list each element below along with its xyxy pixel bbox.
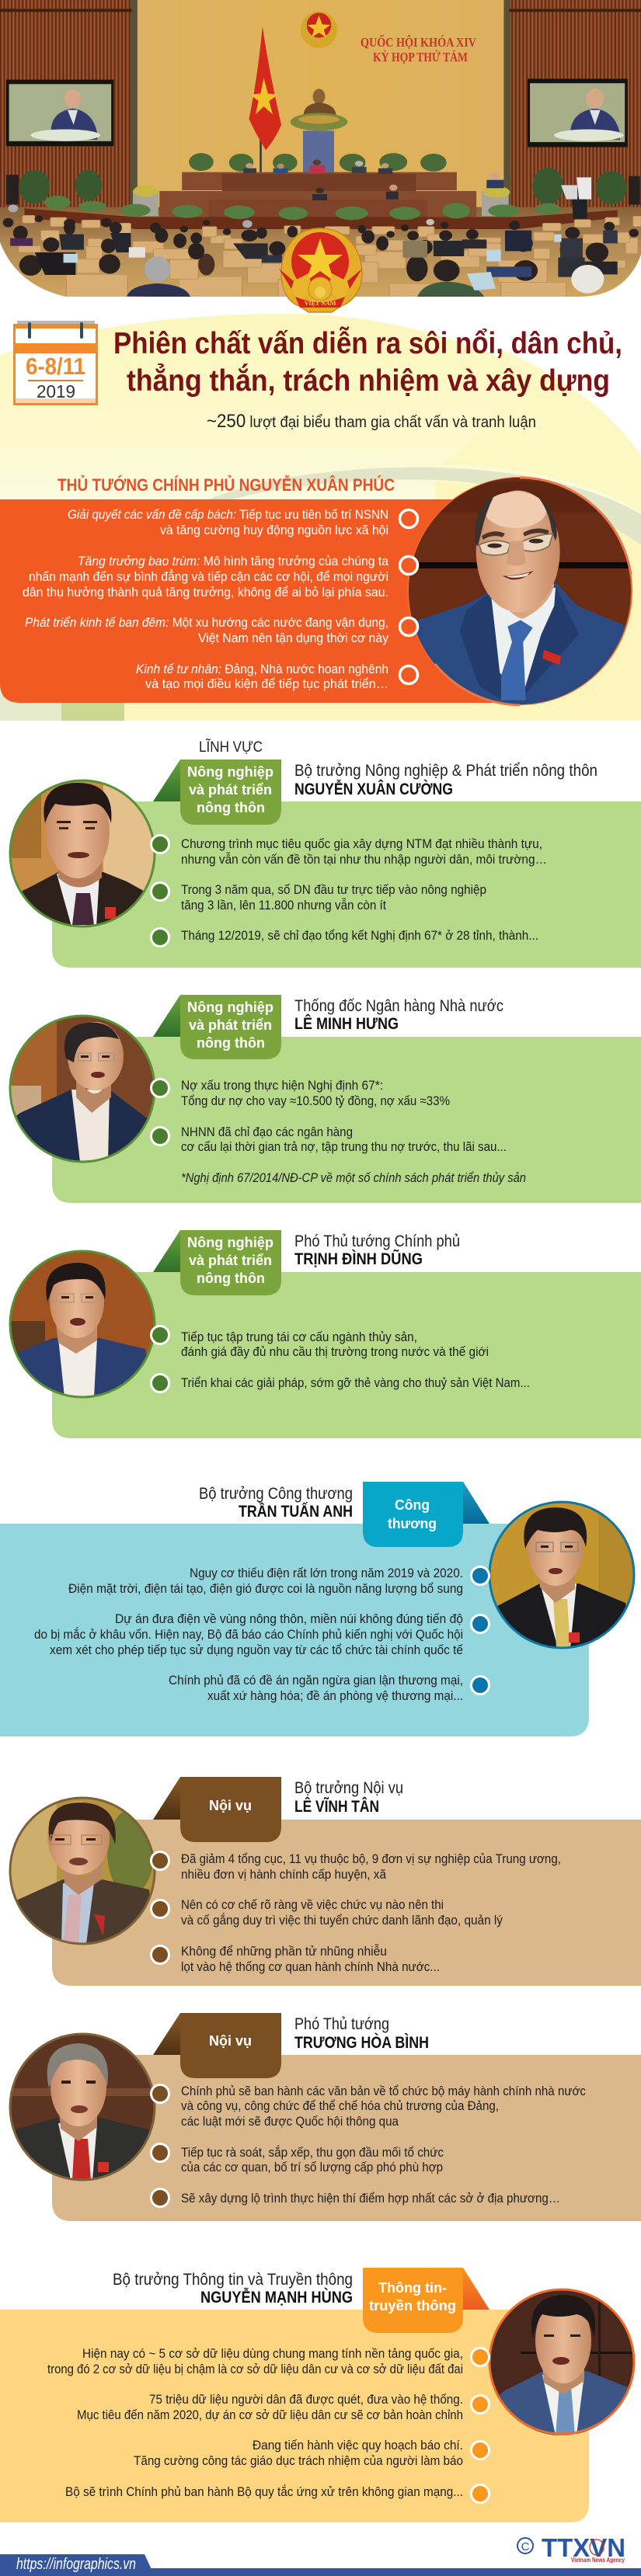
panel: Lê Vĩnh Tân (10, 1777, 641, 1986)
text: Trong 3 năm qua, số DN đầu tư trực tiếp vào nông nghiệp (181, 882, 486, 897)
lower hall: stage and audience (0, 160, 641, 301)
side plants (19, 168, 627, 204)
small emblem on the wall (301, 12, 337, 48)
text: và công vụ, công chức để thể chế hóa chủ trương của Đảng, (181, 2098, 499, 2113)
speakers (6, 175, 640, 204)
hall title text: QUỐC HỘI KHÓA XIV (361, 34, 477, 50)
text: policy points (23, 507, 388, 691)
text: nhiều đơn vị hành chính cấp huyện, xã (181, 1867, 386, 1882)
portrait (10, 1798, 155, 1944)
text: các luật mới sẽ được Quốc hội thông qua (181, 2114, 399, 2129)
portrait (489, 2289, 634, 2435)
tab: home affairs: Nội vụ (209, 1798, 252, 1813)
text: Chính phủ đã có đề án ngăn ngừa gian lận thương mại, (169, 1673, 463, 1688)
text: Đang tiến hành việc quy hoạch báo chí. (253, 2438, 463, 2453)
text: Sẽ xây dựng lộ trình thực hiện thí điểm hợp nhất các sở ở địa phương… (181, 2191, 560, 2206)
text: Không để những phần tử nhũng nhiễu (181, 1944, 387, 1959)
tab: industry and trade: Công (395, 1497, 430, 1513)
text: Dự án đưa điện về vùng nông thôn, miền núi không đúng tiến độ (115, 1611, 463, 1626)
tab: information and communications: Thông tin- (378, 2280, 447, 2296)
text: *Nghị định 67/2014/NĐ-CP về một số chính sách phát triển thủy sản (181, 1170, 526, 1185)
tab: information and communications: truyền thông (369, 2298, 456, 2314)
text: lọt vào hệ thống cơ quan hành chính Nhà nước... (181, 1959, 440, 1974)
role and name (294, 1779, 403, 1816)
tab: home affairs: Nội vụ (209, 2033, 252, 2049)
role and name: LÊ VĨNH TÂN (294, 1797, 379, 1816)
text: policy points: Việt Nam nên tận dụng thời cơ này (198, 631, 388, 645)
text (181, 1078, 526, 1185)
right screen (528, 78, 628, 147)
text: đánh giá đầy đủ nhu cầu thị trường trong nước và thế giới (181, 1344, 489, 1359)
text: Chương trình mục tiêu quốc gia xây dựng NTM đạt nhiều thành tựu, (181, 836, 542, 851)
portrait (489, 1502, 634, 1648)
role and name: Phó Thủ tướng Chính phủ (294, 1232, 460, 1250)
tab: home affairs (153, 2013, 281, 2078)
role and name: Bộ trưởng Nông nghiệp & Phát triển nông thôn (294, 762, 597, 780)
text: policy points: nhấn mạnh đến sự bình đẳng và tiếp cận các cơ hội, để mọi người (29, 569, 388, 584)
logo: TTXVN: C (521, 2540, 530, 2553)
footer bar with URL (0, 2554, 641, 2576)
role and name (294, 997, 503, 1033)
tab: agriculture: Nông nghiệp (187, 1235, 273, 1250)
podiums (133, 186, 510, 216)
text: xem xét cho phép tiếp tục sử dụng nguồn vay từ các tổ chức tài chính quốc tế (50, 1643, 463, 1657)
text: policy points: và tạo mọi điều kiện để tiếp tục phát triển… (145, 676, 388, 691)
text: Chính phủ sẽ ban hành các văn bản về tổ chức bộ máy hành chính nhà nước (181, 2084, 586, 2098)
tab: agriculture: nông thôn (197, 800, 265, 815)
panel: Nguyễn Mạnh Hùng (0, 2268, 634, 2522)
background: yellow and green arcs (0, 314, 641, 721)
logo: TTXVN: TTXVN (542, 2533, 625, 2562)
left screen (6, 80, 113, 146)
date: 6-8/11 (26, 353, 85, 380)
text: policy points: Kinh tế tư nhân: Đảng, Nhà nước hoan nghênh (136, 662, 388, 676)
text: 75 triệu dữ liệu người dân đã được quét, đưa vào hệ thống. (149, 2392, 463, 2407)
role and name (294, 762, 597, 798)
text (181, 1330, 530, 1390)
head table people (243, 160, 503, 200)
tab: agriculture: Nông nghiệp (187, 764, 273, 780)
bullets (151, 836, 169, 946)
year: 2019 (37, 381, 75, 402)
role and name (294, 2015, 429, 2052)
panel: Trần Tuấn Anh (0, 1482, 634, 1736)
text: policy points: Tăng trưởng bao trùm: Mô hình tăng trưởng của chúng ta (78, 554, 388, 568)
heading: THỦ TƯỚNG CHÍNH PHỦ NGUYỄN XUÂN PHÚC (57, 475, 395, 495)
text (181, 1851, 561, 1974)
cameraman (561, 177, 591, 219)
footer bar with URL: https://infographics.vn (16, 2556, 136, 2573)
tab: agriculture (153, 760, 281, 825)
text: Nợ xấu trong thực hiện Nghị định 67*: (181, 1078, 383, 1093)
text: Bộ sẽ trình Chính phủ ban hành Bộ quy tắc ứng xử trên không gian mạng... (65, 2484, 463, 2499)
heading: LĨNH VỰC: LĨNH VỰC (199, 739, 263, 756)
panel: Lê Minh Hưng (10, 995, 641, 1203)
role and name: Bộ trưởng Thông tin và Truyền thông (113, 2271, 353, 2289)
role and name: TRỊNH ĐÌNH DŨNG (294, 1250, 423, 1268)
text: Điện mặt trời, điện tái tạo, điện gió được coi là nguồn năng lượng bổ sung (68, 1581, 463, 1596)
text: và cố gắng duy trì việc thi tuyển chức danh lãnh đạo, quản lý (181, 1913, 503, 1928)
role and name: TRƯƠNG HÒA BÌNH (294, 2033, 429, 2052)
bullets (471, 2348, 489, 2502)
portrait (10, 780, 155, 926)
text: Đã giảm 4 tổng cục, 11 vụ thuộc bộ, 9 đơn vị sự nghiệp của Trung ương, (181, 1851, 561, 1866)
hall title text (361, 34, 477, 64)
icon: national emblem: VIỆT NAM (305, 300, 336, 307)
bullets (399, 509, 418, 683)
text: Nên có cơ chế rõ ràng về việc chức vụ nào nên thi (181, 1897, 444, 1912)
tab: home affairs (153, 1777, 281, 1842)
bullets (151, 1079, 169, 1145)
tab: agriculture: và phát triển (189, 782, 272, 798)
panel: Trịnh Đình Dũng (10, 1230, 641, 1438)
text: Tiếp tục rà soát, sắp xếp, thu gọn đầu mối tổ chức (181, 2145, 444, 2160)
icon: national emblem (279, 228, 362, 312)
portrait (10, 1016, 155, 1162)
logo: TTXVN: Vietnam News Agency (571, 2556, 625, 2564)
portrait: Nguyễn Xuân Phúc (407, 477, 632, 707)
text: Tổng dư nợ cho vay ≈10.500 tỷ đồng, nợ xấu ≈33% (181, 1093, 450, 1108)
tab: agriculture (153, 995, 281, 1059)
tab: agriculture: và phát triển (189, 1017, 272, 1033)
text: Tăng cường công tác giáo dục trách nhiệm của người làm báo (134, 2453, 463, 2468)
text: Triển khai các giải pháp, sớm gỡ thẻ vàng cho thuỷ sản Việt Nam... (181, 1375, 530, 1390)
text: Tiếp tục tập trung tái cơ cấu ngành thủy sản, (181, 1330, 417, 1344)
tab: agriculture: Nông nghiệp (187, 999, 273, 1015)
title (113, 326, 622, 398)
tab: industry and trade: thương (388, 1516, 437, 1531)
text: trong đó 2 cơ sở dữ liệu bị chậm là cơ sở dữ liệu dân cư và cơ sở dữ liệu đất đai (47, 2362, 463, 2376)
upper hall: walls, flag, screens (0, 0, 641, 207)
hero photo: National Assembly hall (0, 0, 641, 301)
role and name (199, 1485, 353, 1521)
tab: agriculture (153, 1230, 281, 1295)
role and name: Phó Thủ tướng (294, 2015, 389, 2033)
text (181, 2084, 586, 2206)
text: cơ cấu lại thời gian trả nợ, tập trung thu nợ trước, thu lãi sau... (181, 1139, 507, 1154)
role and name: Thống đốc Ngân hàng Nhà nước (294, 997, 503, 1015)
text (181, 836, 547, 943)
role and name (113, 2271, 353, 2307)
role and name: TRẦN TUẤN ANH (239, 1503, 353, 1521)
role and name: NGUYỄN MẠNH HÙNG (200, 2288, 353, 2307)
delegates (3, 204, 639, 297)
flag (249, 26, 281, 172)
text: Mục tiêu đến năm 2020, dự án cơ sở dữ liệu dân cư sẽ cơ bản hoàn chỉnh (77, 2407, 463, 2422)
text: của các cơ quan, bố trí số lượng cấp phó phù hợp (181, 2160, 443, 2174)
text: tăng 3 lần, lên 11.800 nhưng vẫn còn ít (181, 898, 386, 913)
text: xuất xứ hàng hóa; đề án phòng vệ thương mại... (207, 1688, 463, 1703)
text: policy points: và tăng cường huy động nguồn lực xã hội (160, 523, 388, 537)
tablets (64, 235, 562, 290)
panel: Nguyễn Xuân Cường (10, 760, 641, 968)
text: nhưng vẫn còn vấn đề tồn tại như thu nhập người dân, môi trường… (181, 852, 547, 867)
role and name: Bộ trưởng Nội vụ (294, 1779, 403, 1797)
text: NHNN đã chỉ đạo các ngân hàng (181, 1125, 353, 1139)
role and name: Bộ trưởng Công thương (199, 1485, 353, 1503)
bullets (151, 2084, 169, 2207)
tab: agriculture: nông thôn (197, 1271, 265, 1286)
panel: Prime Minister (0, 466, 641, 714)
panel: Trương Hòa Bình (10, 2013, 641, 2221)
tab: information and communications (363, 2268, 489, 2333)
subtitle: ~250 lượt đại biểu tham gia chất vấn và tranh luận (207, 411, 536, 432)
portrait (10, 2034, 155, 2180)
text: Hiện nay có ~ 5 cơ sở dữ liệu dùng chung mang tính nền tảng quốc gia, (82, 2346, 463, 2361)
stage plants (44, 196, 561, 220)
bullets (471, 1567, 489, 1695)
text (34, 1566, 463, 1703)
tab: agriculture: và phát triển (189, 1253, 272, 1268)
hall title text: KỲ HỌP THỨ TÁM (373, 50, 468, 64)
tab: agriculture: nông thôn (197, 1035, 265, 1051)
text: Nguy cơ thiếu điện rất lớn trong năm 2019 và 2020. (190, 1566, 463, 1580)
tab: industry and trade (363, 1482, 489, 1547)
role and name (294, 1232, 460, 1268)
bullets (151, 1851, 169, 1963)
desks and chairs (19, 215, 641, 297)
text: policy points: dân thụ hưởng thành quả tăng trưởng, không để ai bỏ lại phía sau. (23, 585, 388, 600)
bust and flowers (291, 89, 347, 174)
text: Tháng 12/2019, sẽ chỉ đạo tổng kết Nghị định 67* ở 28 tỉnh, thành... (181, 928, 538, 943)
text: policy points: Phát triển kinh tế ban đêm: Một xu hướng các nước đang vận dụng, (25, 615, 388, 630)
text: policy points: Giải quyết các vấn đề cấp bách: Tiếp tục ưu tiên bố trí NSNN (68, 507, 388, 522)
role and name: LÊ MINH HƯNG (294, 1014, 399, 1033)
bullets (151, 1326, 169, 1392)
text: do bị mắc ở khâu vốn. Hiện nay, Bộ đã báo cáo Chính phủ kiến nghị với Quốc hội (34, 1627, 463, 1642)
icon: calendar with date (13, 321, 98, 405)
portrait (10, 1251, 155, 1397)
text (47, 2346, 463, 2499)
role and name: NGUYỄN XUÂN CƯỜNG (294, 780, 453, 798)
row of palms (189, 153, 447, 172)
